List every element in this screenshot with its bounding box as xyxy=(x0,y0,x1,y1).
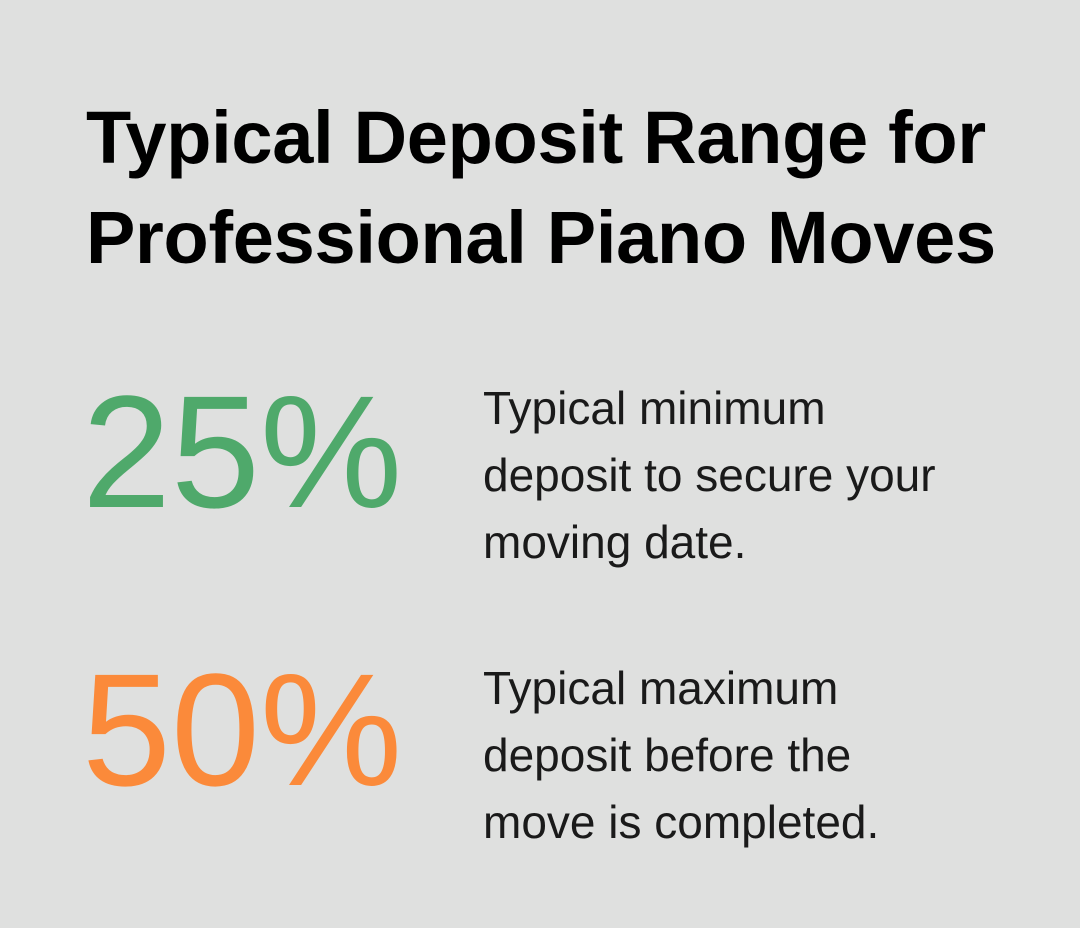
title: Typical Deposit Range for xyxy=(86,96,986,179)
text: minimum deposit: deposit to secure your xyxy=(483,449,936,501)
stat: 50%: 50% xyxy=(82,640,402,819)
text: minimum deposit: Typical minimum xyxy=(483,382,826,434)
text: minimum deposit: moving date. xyxy=(483,516,746,568)
text: maximum deposit: Typical maximum xyxy=(483,662,838,714)
stat: 25%: 25% xyxy=(82,362,402,541)
text: minimum deposit xyxy=(483,382,936,568)
title xyxy=(86,96,996,279)
title: Professional Piano Moves xyxy=(86,196,996,279)
text: maximum deposit: move is completed. xyxy=(483,796,879,848)
text: maximum deposit xyxy=(483,662,879,848)
text: maximum deposit: deposit before the xyxy=(483,729,851,781)
